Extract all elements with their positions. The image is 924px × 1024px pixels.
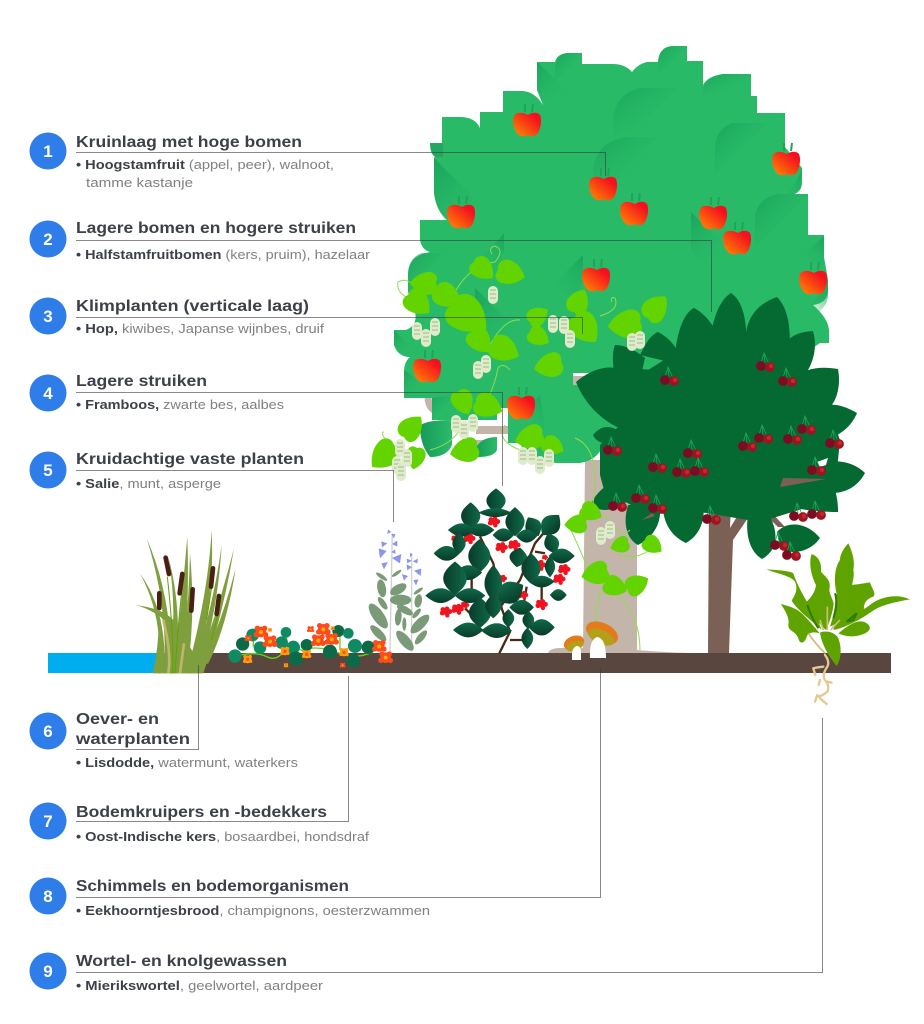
number badge 1 <box>30 132 66 170</box>
cherry tree crown <box>576 293 865 559</box>
heading 3: Klimplanten (verticale laag) <box>76 298 309 315</box>
heading 8: Schimmels en bodemorganismen <box>76 878 349 895</box>
hop cones <box>392 286 645 545</box>
sage plant <box>365 529 432 653</box>
apple tree trunk <box>428 396 690 653</box>
number badge 1: 1 <box>43 142 53 161</box>
heading 5: Kruidachtige vaste planten <box>76 451 304 468</box>
raspberry shrub <box>425 488 575 653</box>
heading 6: Oever- en <box>76 711 159 728</box>
number badge 7: 7 <box>43 812 53 831</box>
description 3: • Hop, kiwibes, Japanse wijnbes, druif <box>76 321 324 336</box>
number badge 4: 4 <box>43 384 53 403</box>
horseradish root <box>813 655 832 704</box>
horseradish plant <box>767 543 910 704</box>
description 1: • Hoogstamfruit (appel, peer), walnoot, <box>76 157 334 172</box>
large mushroom <box>582 617 622 658</box>
number badge 9: 9 <box>43 962 53 981</box>
description 6: • Lisdodde, watermunt, waterkers <box>76 755 299 770</box>
sage stems <box>390 533 412 652</box>
item 7: ground cover <box>30 802 369 844</box>
item 8: fungi <box>30 878 430 918</box>
cherries <box>603 353 844 561</box>
heading 4: Lagere struiken <box>76 373 207 390</box>
mushrooms <box>562 617 622 660</box>
cherry tree trunk <box>708 497 785 653</box>
hop leaves <box>363 253 675 600</box>
item 3: climbers <box>30 298 324 336</box>
heading 7: Bodemkruipers en -bedekkers <box>76 804 327 821</box>
description 2: • Halfstamfruitbomen (kers, pruim), hazelaar <box>76 247 371 262</box>
water <box>48 653 214 673</box>
vines <box>382 246 650 650</box>
item 9: root crops <box>30 952 324 993</box>
number badge 5 <box>30 452 66 488</box>
nasturtium ground cover <box>228 623 393 668</box>
number badge 2 <box>30 220 66 258</box>
number badge 3 <box>30 298 66 334</box>
cattail heads <box>159 558 219 614</box>
reed leaves <box>135 530 236 673</box>
sage flowers <box>379 529 421 585</box>
description 1: tamme kastanje <box>86 175 193 190</box>
item 4: low shrubs <box>30 373 285 412</box>
nasturtium stems <box>240 633 373 658</box>
raspberry leaves <box>425 488 575 649</box>
connector lines <box>76 152 822 972</box>
raspberry berries <box>440 516 570 617</box>
number badge 5: 5 <box>43 461 53 480</box>
description 9: • Mierikswortel , geelwortel, aardpeer <box>76 978 324 993</box>
apple tree crown <box>394 46 829 463</box>
raspberry stems <box>465 523 552 653</box>
horseradish leaves <box>767 543 910 666</box>
number badge 4 <box>30 374 66 412</box>
number badge 3: 3 <box>43 307 53 326</box>
sage leaves <box>365 569 432 653</box>
nasturtium leaves <box>228 625 375 668</box>
description 1 <box>76 157 334 190</box>
number badge 6 <box>30 712 66 750</box>
heading 2: Lagere bomen en hogere struiken <box>76 220 356 237</box>
number badge 6: 6 <box>43 722 53 741</box>
small mushroom <box>562 633 586 660</box>
description 5: • Salie , munt, asperge <box>76 476 221 491</box>
cattails and reeds <box>135 530 236 673</box>
item 1: canopy layer <box>30 132 334 190</box>
crown shaded leaves <box>394 46 828 430</box>
climbing hop plant <box>363 246 675 650</box>
heading 6: waterplanten <box>75 731 190 748</box>
heading 1: Kruinlaag met hoge bomen <box>76 134 302 151</box>
item 2: low trees and shrubs <box>30 220 371 262</box>
number badge 7 <box>30 802 66 840</box>
heading 9: Wortel- en knolgewassen <box>76 953 287 970</box>
soil <box>186 653 891 673</box>
description 7: • Oost-Indische kers , bosaardbei, hondsdraf <box>76 829 369 844</box>
number badge 8: 8 <box>43 887 53 906</box>
heading 6 <box>75 711 190 748</box>
number badge 9 <box>30 952 66 990</box>
nasturtium flowers <box>243 623 393 667</box>
item 6: waterside plants <box>30 711 299 770</box>
crown small leaves <box>420 143 497 457</box>
item 5: herbaceous perennials <box>30 451 304 491</box>
apples <box>413 104 827 419</box>
description 4: • Framboos, zwarte bes, aalbes <box>76 397 285 412</box>
number badge 8 <box>30 878 66 914</box>
number badge 2: 2 <box>43 230 53 249</box>
description 8: • Eekhoorntjesbrood , champignons, oesterzwammen <box>76 903 430 918</box>
